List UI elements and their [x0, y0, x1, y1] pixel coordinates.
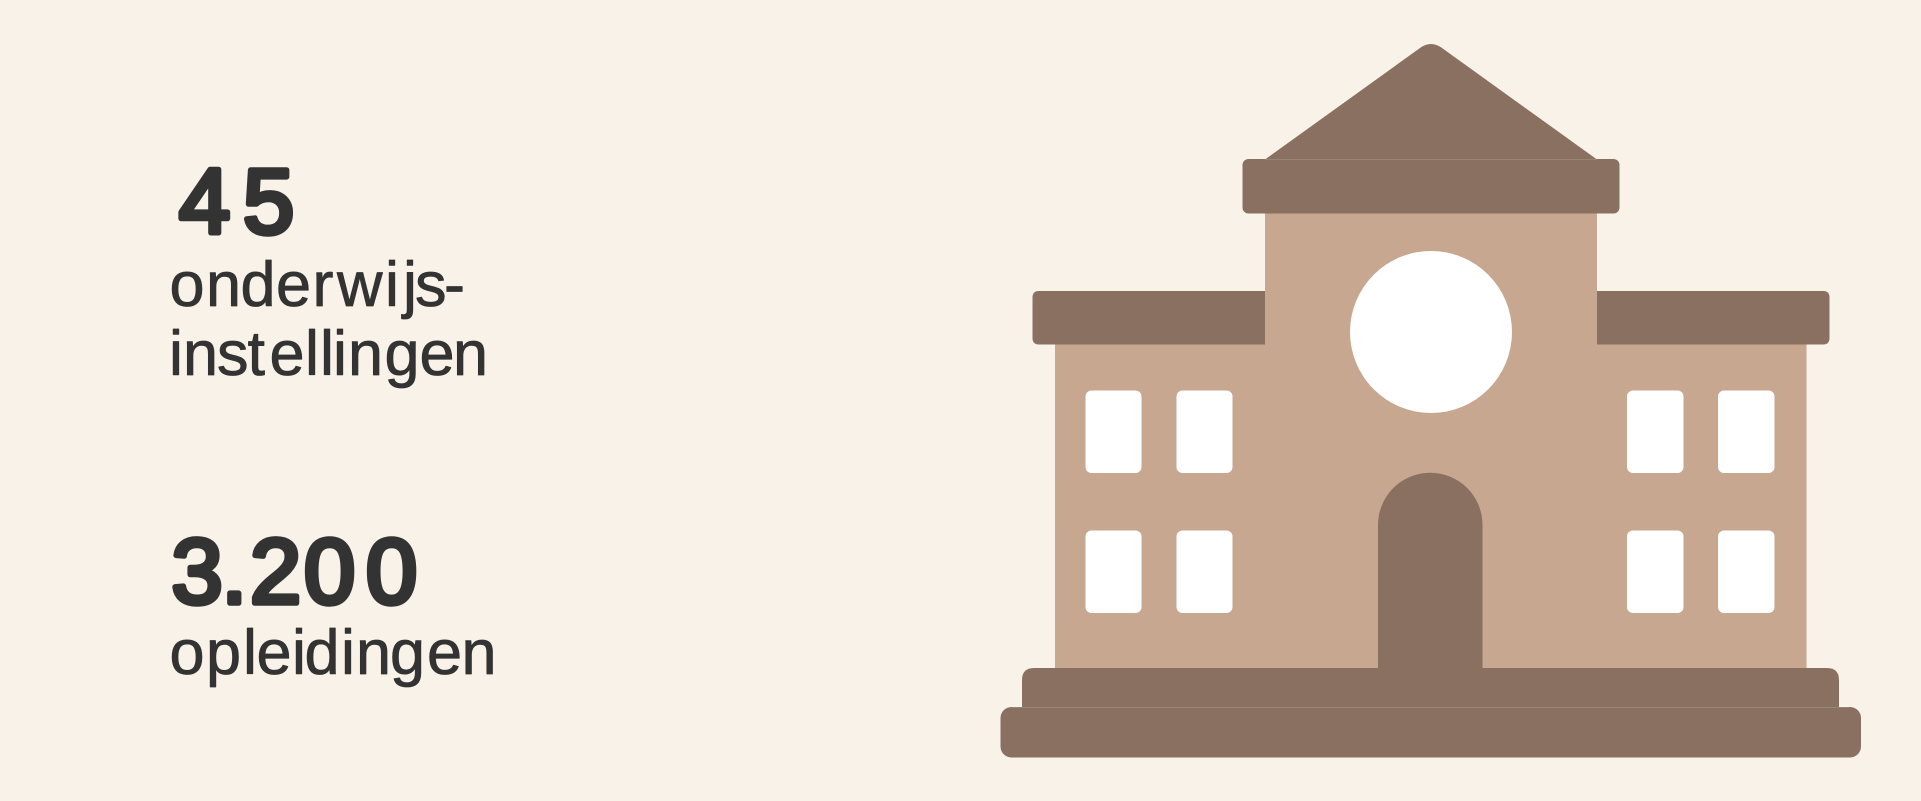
- label: onderwijs-instellingen: onderwijs-: [170, 250, 465, 320]
- icon: school building: [1000, 44, 1861, 758]
- number: 45: 45: [179, 151, 294, 253]
- right cornice: [1597, 291, 1830, 344]
- upper step: [1022, 668, 1839, 708]
- statistic: 3.200 opleidingen: [170, 521, 497, 688]
- left cornice: [1032, 291, 1265, 344]
- label: opleidingen: opleidingen: [170, 618, 497, 688]
- tower cornice: [1242, 159, 1620, 214]
- label: onderwijs-instellingen: instellingen: [169, 319, 488, 389]
- left windows: [1086, 390, 1232, 613]
- right windows: [1627, 390, 1774, 613]
- round window: [1350, 251, 1512, 413]
- roof: [1265, 44, 1597, 160]
- door: [1378, 473, 1482, 669]
- number: 3.200: 3.200: [172, 521, 417, 623]
- label: onderwijs-instellingen: [169, 250, 488, 389]
- lower step: [1000, 707, 1861, 758]
- building body: [1055, 200, 1806, 669]
- statistic: 45 onderwijsinstellingen: [169, 151, 488, 389]
